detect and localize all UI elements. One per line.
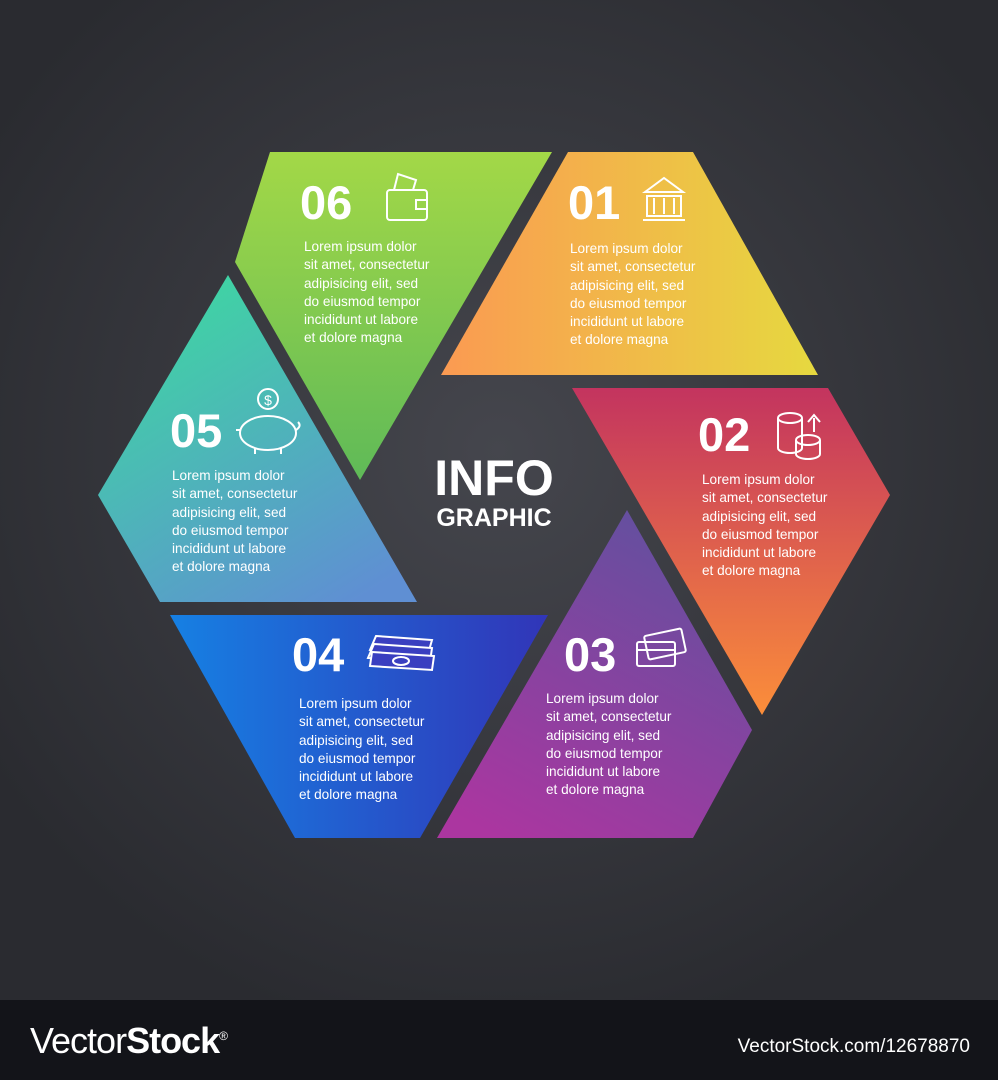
text: sit amet, consectetur — [570, 259, 695, 274]
text: incididunt ut labore — [172, 541, 286, 556]
text: Lorem ipsum dolor — [546, 691, 659, 706]
text: Lorem ipsum dolor — [304, 239, 417, 254]
text: sit amet, consectetur — [172, 486, 297, 501]
text 05 — [170, 404, 298, 574]
text: incididunt ut labore — [299, 769, 413, 784]
segment 06 — [235, 152, 552, 480]
center title: GRAPHIC — [436, 504, 552, 532]
text: Lorem ipsum dolor — [570, 241, 683, 256]
text: sit amet, consectetur — [304, 257, 429, 272]
text: 04 — [292, 628, 344, 681]
text 03 — [546, 628, 672, 797]
text: do eiusmod tempor — [304, 294, 420, 309]
text: do eiusmod tempor — [570, 296, 686, 311]
text: do eiusmod tempor — [299, 751, 415, 766]
text: et dolore magna — [304, 330, 402, 345]
text: Lorem ipsum dolor — [172, 468, 285, 483]
text 04 — [292, 628, 424, 802]
footer watermark: VectorStock® — [30, 1020, 227, 1061]
text 06 — [300, 176, 430, 345]
icon: wallet — [387, 174, 427, 220]
text: sit amet, consectetur — [299, 714, 424, 729]
text: et dolore magna — [299, 787, 397, 802]
text: do eiusmod tempor — [546, 746, 662, 761]
icon: coins — [778, 413, 820, 459]
text: incididunt ut labore — [570, 314, 684, 329]
segment 04 — [170, 615, 548, 838]
text: 02 — [698, 408, 750, 461]
text 01 — [568, 176, 696, 347]
icon: piggy bank — [236, 389, 300, 454]
text: incididunt ut labore — [702, 545, 816, 560]
segment 05 — [98, 275, 417, 602]
text: adipisicing elit, sed — [570, 278, 684, 293]
text: do eiusmod tempor — [172, 523, 288, 538]
segment 02 — [572, 388, 890, 715]
text: et dolore magna — [570, 332, 668, 347]
text: Lorem ipsum dolor — [702, 472, 815, 487]
text: adipisicing elit, sed — [546, 728, 660, 743]
text: et dolore magna — [172, 559, 270, 574]
text: adipisicing elit, sed — [304, 276, 418, 291]
text: sit amet, consectetur — [702, 490, 827, 505]
center title — [434, 450, 554, 532]
icon: card — [637, 628, 686, 666]
icon: piggy bank: $ — [264, 392, 272, 408]
segment 01 — [441, 152, 818, 375]
text: adipisicing elit, sed — [172, 505, 286, 520]
footer watermark — [30, 1020, 970, 1061]
text: et dolore magna — [546, 782, 644, 797]
text: 03 — [564, 628, 616, 681]
center title: INFO — [434, 450, 554, 506]
text: 06 — [300, 176, 352, 229]
text: Lorem ipsum dolor — [299, 696, 412, 711]
segment 03 — [437, 510, 752, 838]
text 02 — [698, 408, 828, 578]
text: incididunt ut labore — [304, 312, 418, 327]
text: sit amet, consectetur — [546, 709, 671, 724]
text: incididunt ut labore — [546, 764, 660, 779]
icon: bank — [643, 178, 685, 220]
text: adipisicing elit, sed — [702, 509, 816, 524]
text: 01 — [568, 176, 620, 229]
text: do eiusmod tempor — [702, 527, 818, 542]
icon: money — [368, 636, 434, 670]
text: adipisicing elit, sed — [299, 733, 413, 748]
text: et dolore magna — [702, 563, 800, 578]
text: 05 — [170, 404, 222, 457]
footer watermark: VectorStock.com/12678870 — [738, 1036, 970, 1057]
